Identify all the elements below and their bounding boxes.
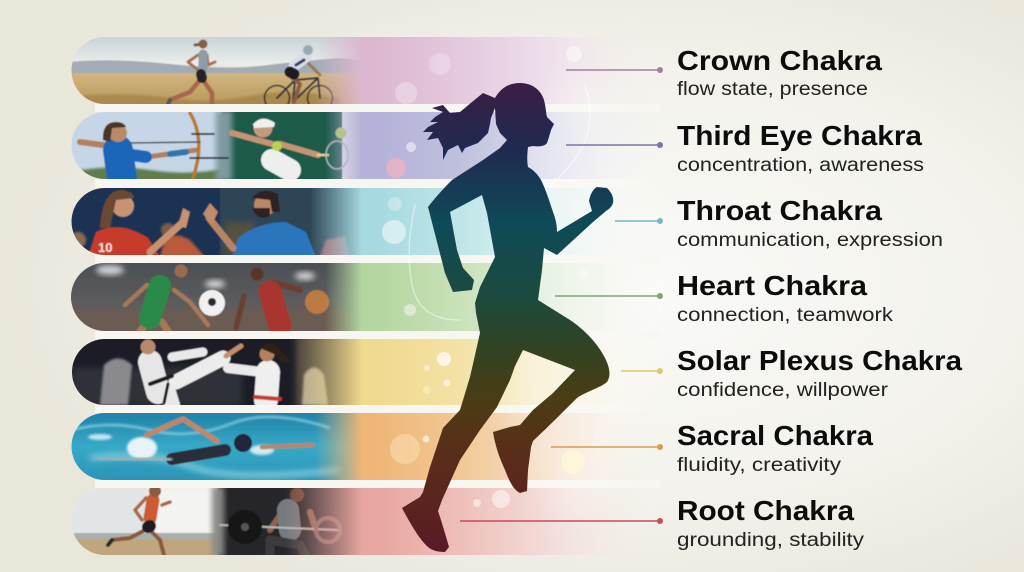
label: solar plexus chakra: Solar Plexus Chakra <box>677 345 962 376</box>
connector: crown <box>566 67 663 73</box>
photo: beach runner and weightlifter <box>72 488 360 555</box>
label: third eye chakra: Third Eye Chakra <box>677 120 922 151</box>
connector: heart <box>555 293 663 299</box>
label: third eye chakra <box>677 120 924 176</box>
connector: root <box>460 518 663 524</box>
photo: referee and players gesturing: 10 <box>98 240 112 255</box>
photo: martial artists <box>72 339 360 405</box>
photo: soccer and basketball players <box>71 263 360 331</box>
label: heart chakra <box>677 270 894 326</box>
photo: runner and cyclist <box>72 37 360 104</box>
bokeh lights and energy swirls <box>382 46 645 520</box>
connector: throat <box>615 218 663 224</box>
label: throat chakra <box>677 195 943 251</box>
photo: swimmer <box>72 413 360 480</box>
connector: sacral <box>551 444 663 450</box>
label: root chakra: Root Chakra <box>677 495 854 526</box>
runner silhouette <box>402 83 613 552</box>
label: solar plexus chakra <box>677 345 962 401</box>
connector: third eye <box>566 142 663 148</box>
label: root chakra: grounding, stability <box>677 530 865 551</box>
label: sacral chakra: Sacral Chakra <box>677 420 873 451</box>
panel: chakra colour bands <box>95 37 660 555</box>
label: crown chakra: Crown Chakra <box>677 45 882 76</box>
label: crown chakra: flow state, presence <box>677 79 868 100</box>
label: sacral chakra <box>677 420 873 476</box>
photo: referee and players gesturing <box>72 188 360 255</box>
label: throat chakra: Throat Chakra <box>677 195 882 226</box>
label: heart chakra: connection, teamwork <box>677 305 894 326</box>
photo: archer and tennis player <box>72 112 360 179</box>
label: root chakra <box>677 495 865 551</box>
label: third eye chakra: concentration, awareness <box>677 155 924 176</box>
label: heart chakra: Heart Chakra <box>677 270 867 301</box>
label: throat chakra: communication, expression <box>677 230 943 251</box>
label: solar plexus chakra: confidence, willpower <box>677 380 889 401</box>
label: crown chakra <box>677 45 882 100</box>
connector: solar plexus <box>621 368 663 374</box>
label: sacral chakra: fluidity, creativity <box>677 455 842 476</box>
